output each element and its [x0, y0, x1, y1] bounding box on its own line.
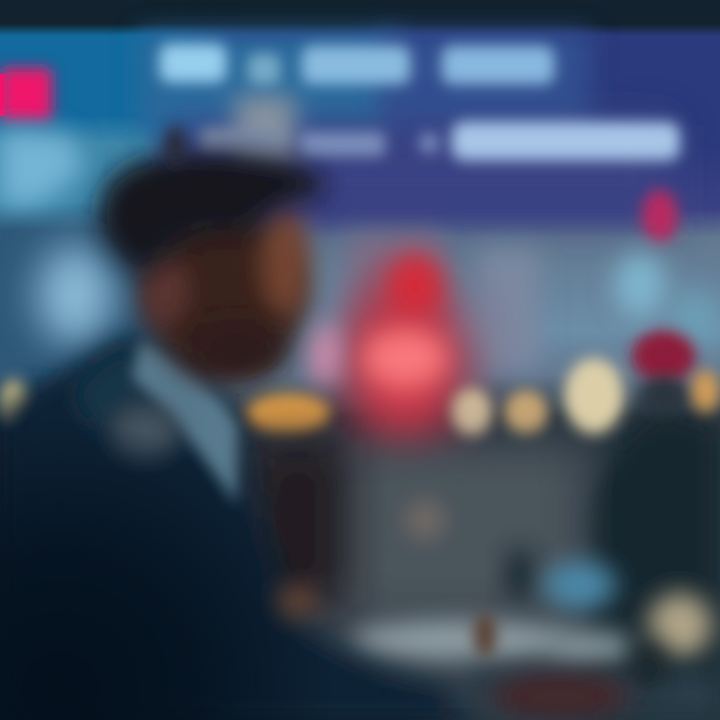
lower room tone: [200, 450, 620, 700]
background: left-side colour column fading inward: [0, 26, 192, 517]
man: face and neck: [141, 206, 309, 380]
edge strip: keeps pink badge at left edge: [0, 74, 5, 116]
jacket shadow, lower-left corner: [0, 420, 330, 720]
lower table area, centre: [250, 440, 720, 720]
background figure with red cap, right: [585, 330, 720, 720]
pink badge, left: [0, 68, 52, 120]
pale blurred shape below badge: [0, 130, 85, 205]
warm lights row: [0, 358, 720, 436]
mid band: blurred screens and windows: [37, 235, 720, 370]
man: dark hair: [98, 125, 325, 275]
magenta accent, right: [642, 190, 678, 242]
banner heading line two (illegible blurred lettering): [200, 122, 680, 160]
banner: coloured screen: [140, 32, 670, 220]
man: jacket and shirt collar: [0, 335, 630, 720]
edge strip: jacket along bottom edge: [0, 708, 500, 720]
red glow, centre: [311, 250, 490, 480]
banner heading line one (illegible blurred lettering): [160, 44, 554, 84]
